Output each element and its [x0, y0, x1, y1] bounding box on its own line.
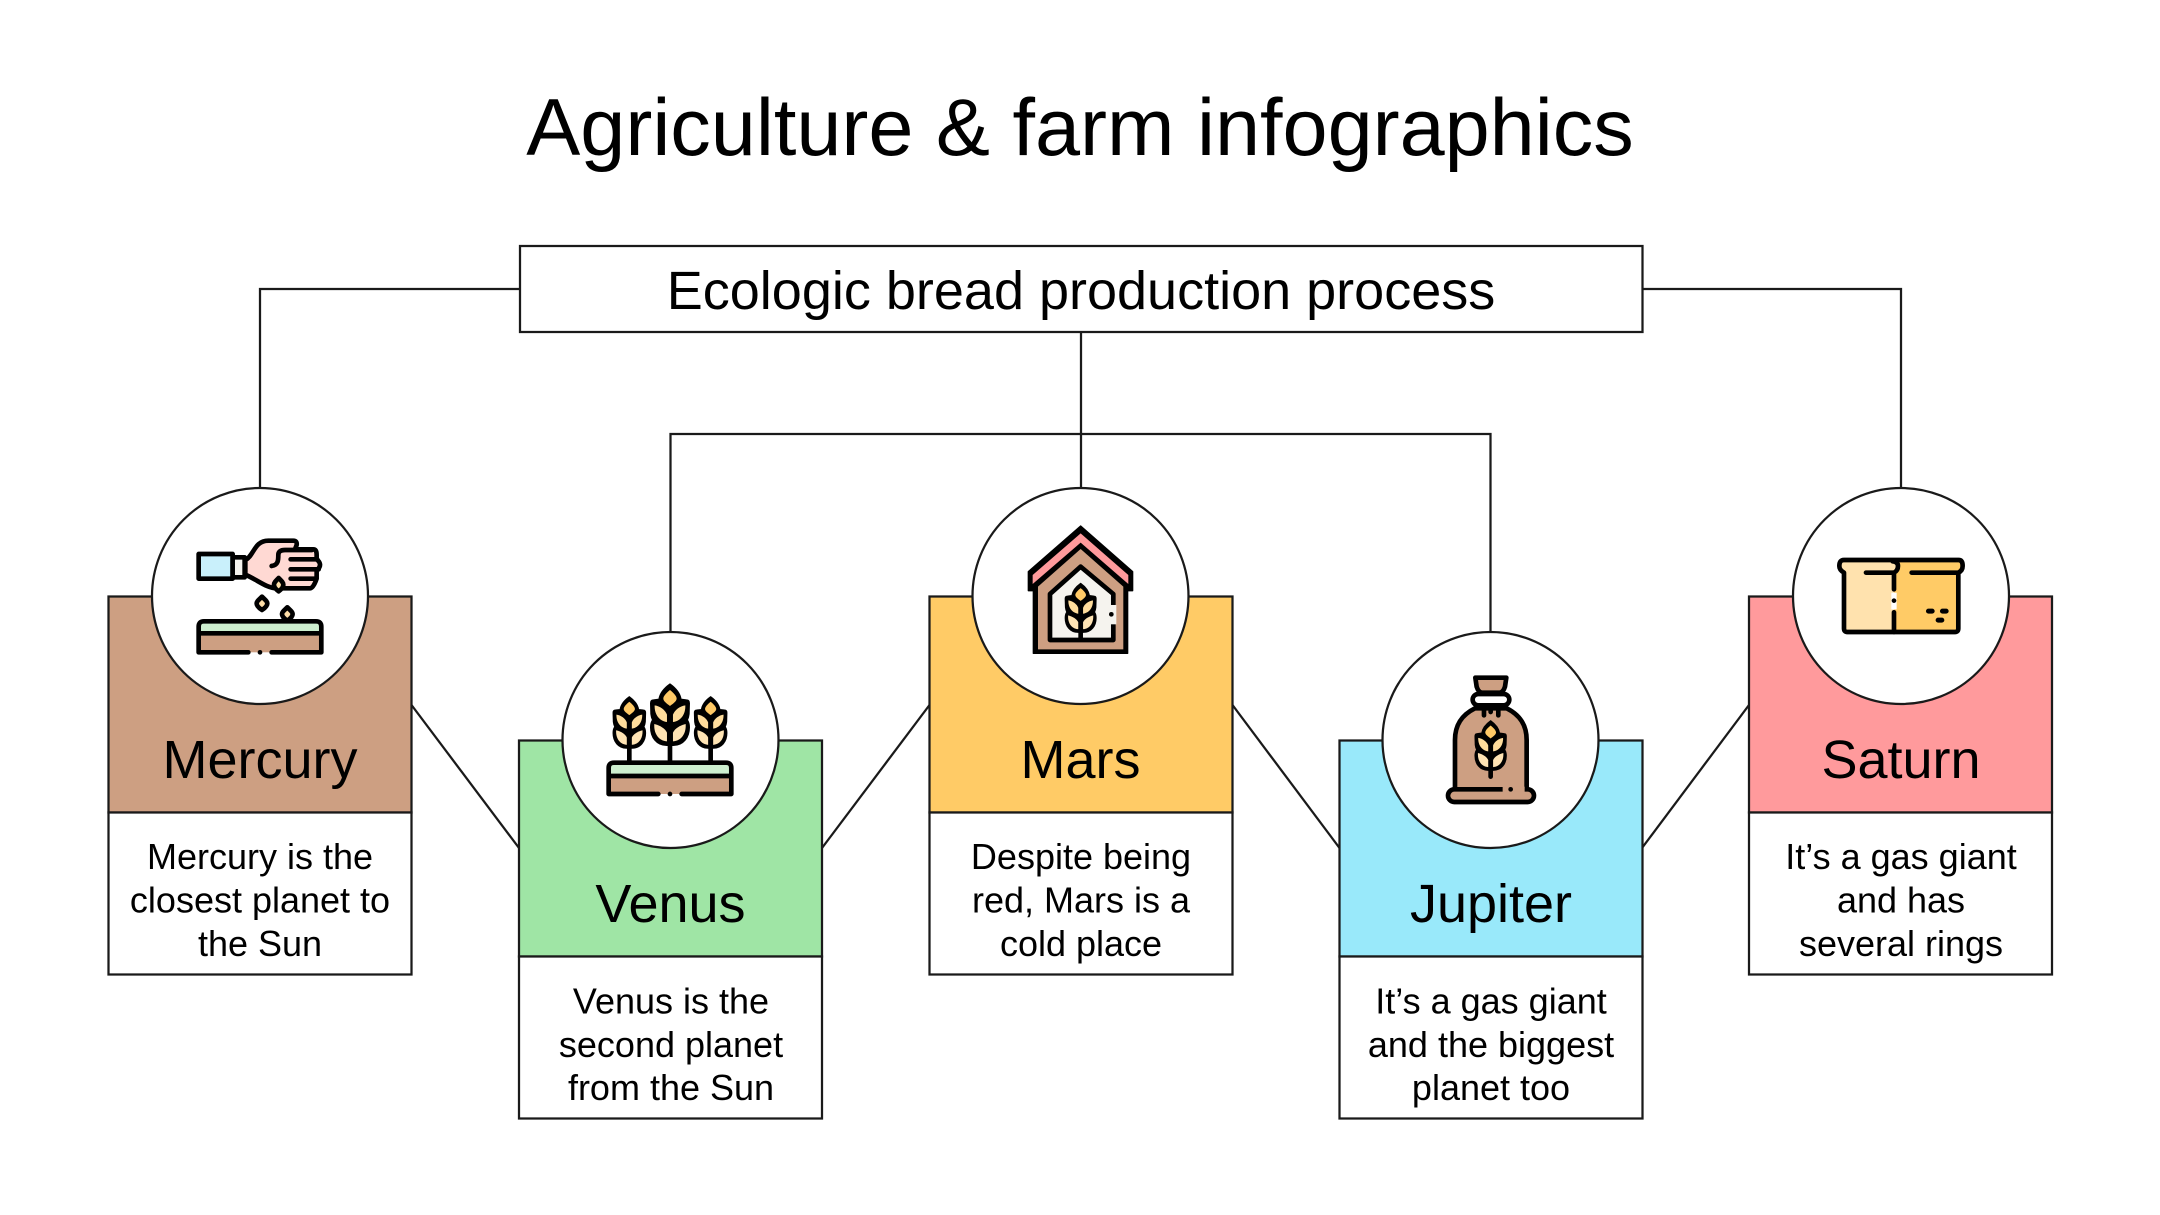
Mars description box: [930, 812, 1232, 974]
Venus colour block: [519, 740, 822, 956]
panel: Venus: [519, 632, 822, 1118]
Venus circle: [562, 632, 778, 848]
icon: granary house: [1028, 526, 1133, 653]
Saturn description box: [1749, 812, 2052, 974]
panel: Mercury: [108, 488, 412, 974]
Saturn heading: Saturn: [1821, 730, 1981, 790]
title: Agriculture & farm infographics: [526, 83, 1634, 173]
Saturn circle: [1793, 488, 2009, 704]
icon: bread loaf: [1839, 560, 1963, 632]
header box: [520, 246, 1642, 332]
Venus heading: Venus: [595, 874, 746, 934]
panel: Jupiter: [1340, 632, 1642, 1118]
Mars colour block: [930, 596, 1232, 812]
Mercury circle: [152, 488, 368, 704]
icon: grain sack: [1448, 678, 1534, 802]
Venus description: from the Sun: [568, 1067, 774, 1108]
Venus description: Venus is the: [573, 980, 769, 1022]
Jupiter description: planet too: [1412, 1067, 1570, 1108]
Jupiter description: It’s a gas giant: [1375, 980, 1607, 1022]
Venus description box: [519, 956, 822, 1118]
Mars heading: Mars: [1020, 730, 1140, 790]
Venus description: second planet: [559, 1024, 783, 1065]
Mercury description box: [108, 812, 412, 974]
icon: hand sowing seeds: [199, 541, 321, 655]
Jupiter description: and the biggest: [1368, 1024, 1614, 1065]
Saturn description: and has: [1837, 880, 1965, 920]
Mars description: Despite being: [971, 836, 1191, 877]
Mercury description: Mercury is the: [147, 836, 373, 877]
panel: Mars: [930, 488, 1232, 974]
connector lines from header to circles: [260, 289, 1901, 848]
Mars description: red, Mars is a: [972, 880, 1191, 920]
Mars description: cold place: [1000, 923, 1162, 964]
Jupiter colour block: [1340, 740, 1642, 956]
Mars circle: [972, 488, 1188, 704]
Saturn colour block: [1749, 596, 2052, 812]
Jupiter description box: [1340, 956, 1642, 1118]
icon: wheat field: [609, 684, 731, 796]
panel: Saturn: [1749, 488, 2052, 974]
Saturn description: It’s a gas giant: [1785, 836, 2017, 877]
Mercury description: closest planet to: [130, 880, 390, 920]
Mercury heading: Mercury: [162, 730, 358, 790]
Mercury description: the Sun: [198, 923, 322, 964]
Jupiter circle: [1382, 632, 1598, 848]
Jupiter heading: Jupiter: [1410, 874, 1572, 934]
Mercury colour block: [108, 596, 412, 812]
header box: Ecologic bread production process: [667, 261, 1495, 321]
Saturn description: several rings: [1799, 923, 2003, 964]
